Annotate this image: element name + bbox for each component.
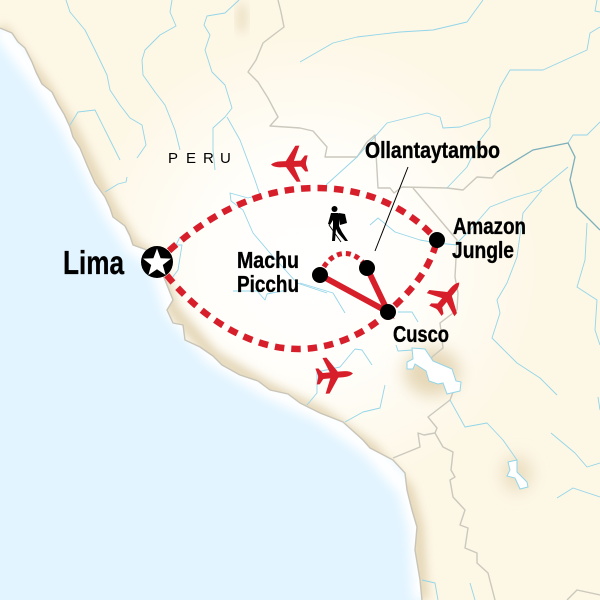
flight route: southern arc — [157, 240, 437, 349]
stop: Ollantaytambo — [359, 260, 375, 276]
label leader line — [375, 167, 408, 251]
flight route: northern arc — [157, 188, 437, 262]
label: Machu Picchu: Picchu — [237, 271, 299, 297]
label: Amazon Jungle: Jungle — [452, 237, 514, 263]
lake: Titicaca — [407, 348, 461, 394]
label: Amazon Jungle — [452, 213, 526, 263]
stop: Amazon Jungle — [429, 232, 445, 248]
label: Cusco: Cusco — [393, 321, 449, 347]
country label: Peru: PERU — [168, 150, 231, 167]
stop: Lima star marker — [141, 246, 173, 278]
stop: Machu Picchu — [312, 267, 328, 283]
plane: south — [314, 355, 354, 395]
ocean — [0, 29, 421, 600]
plane: north — [270, 145, 309, 183]
label: Amazon Jungle: Amazon — [453, 213, 526, 239]
label: Ollantaytambo: Ollantaytambo — [365, 137, 500, 163]
icon: hiker — [328, 206, 348, 242]
label: Machu Picchu — [237, 247, 299, 297]
label: Machu Picchu: Machu — [237, 247, 299, 273]
dark river — [497, 143, 600, 230]
lake: Poopo — [507, 460, 528, 489]
label: Lima: Lima — [63, 244, 125, 281]
stop: Cusco — [380, 304, 396, 320]
country borders — [248, 0, 600, 600]
plane: east — [422, 271, 473, 322]
rail: solid lines to Cusco — [320, 268, 388, 312]
trek: dotted arc — [320, 253, 367, 275]
